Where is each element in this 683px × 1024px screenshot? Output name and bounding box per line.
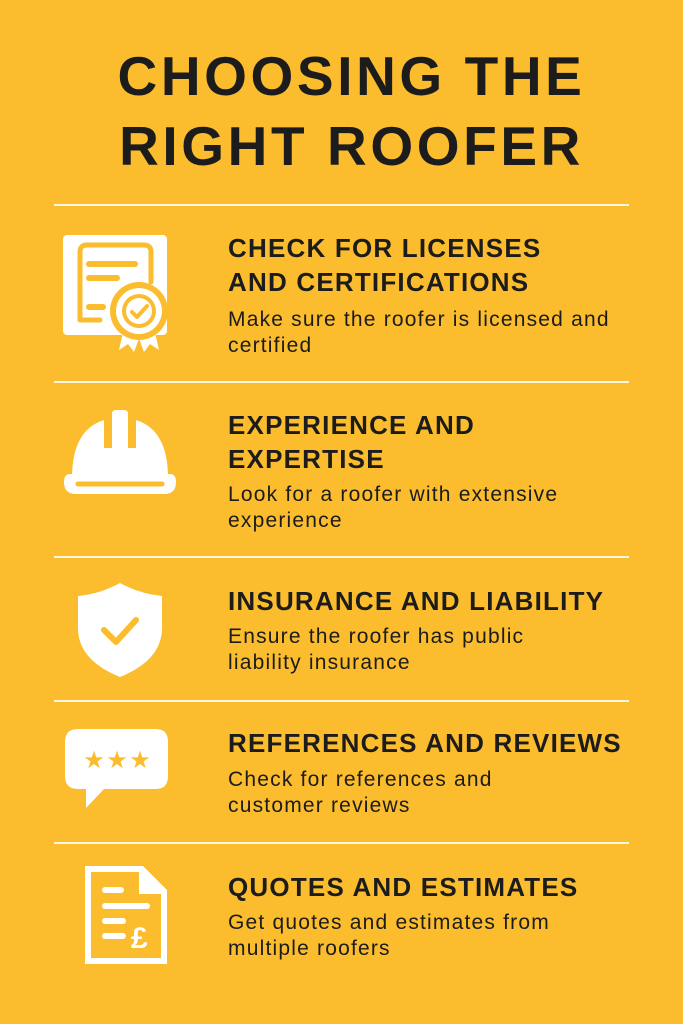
body 2: Look for a roofer with extensive	[228, 483, 558, 506]
heading 1: AND CERTIFICATIONS	[228, 267, 529, 297]
heading 2: EXPERIENCE AND	[228, 410, 475, 440]
body 2	[228, 483, 558, 532]
body 4	[228, 768, 493, 817]
body 1	[228, 308, 610, 357]
body 4: customer reviews	[228, 794, 411, 817]
heading 1	[228, 233, 541, 297]
body 5: multiple roofers	[228, 937, 391, 960]
title	[118, 45, 585, 177]
title: CHOOSING THE	[118, 45, 585, 107]
heading 1: CHECK FOR LICENSES	[228, 233, 541, 263]
body 4: Check for references and	[228, 768, 493, 791]
icon: shield	[78, 583, 162, 677]
body 3	[228, 625, 524, 674]
heading 4: REFERENCES AND REVIEWS	[228, 728, 622, 758]
icon: review bubble: ★	[83, 746, 105, 774]
body 3: liability insurance	[228, 651, 411, 674]
icon: review bubble	[65, 729, 168, 808]
body 1: Make sure the roofer is licensed and	[228, 308, 610, 331]
heading 2: EXPERTISE	[228, 444, 385, 474]
body 1: certified	[228, 334, 312, 357]
icon: review bubble: ★	[106, 746, 128, 774]
icon: certificate	[63, 235, 167, 352]
icon: hard hat	[64, 410, 176, 494]
icon: review bubble: ★	[129, 746, 151, 774]
icon: document with pound	[85, 866, 167, 964]
icon: document with pound: £	[131, 922, 148, 955]
title: RIGHT ROOFER	[119, 115, 584, 177]
heading 2	[228, 410, 475, 474]
body 5: Get quotes and estimates from	[228, 911, 550, 934]
body 2: experience	[228, 509, 343, 532]
heading 5: QUOTES AND ESTIMATES	[228, 872, 578, 902]
heading 3: INSURANCE AND LIABILITY	[228, 586, 604, 616]
body 5	[228, 911, 550, 960]
body 3: Ensure the roofer has public	[228, 625, 524, 648]
